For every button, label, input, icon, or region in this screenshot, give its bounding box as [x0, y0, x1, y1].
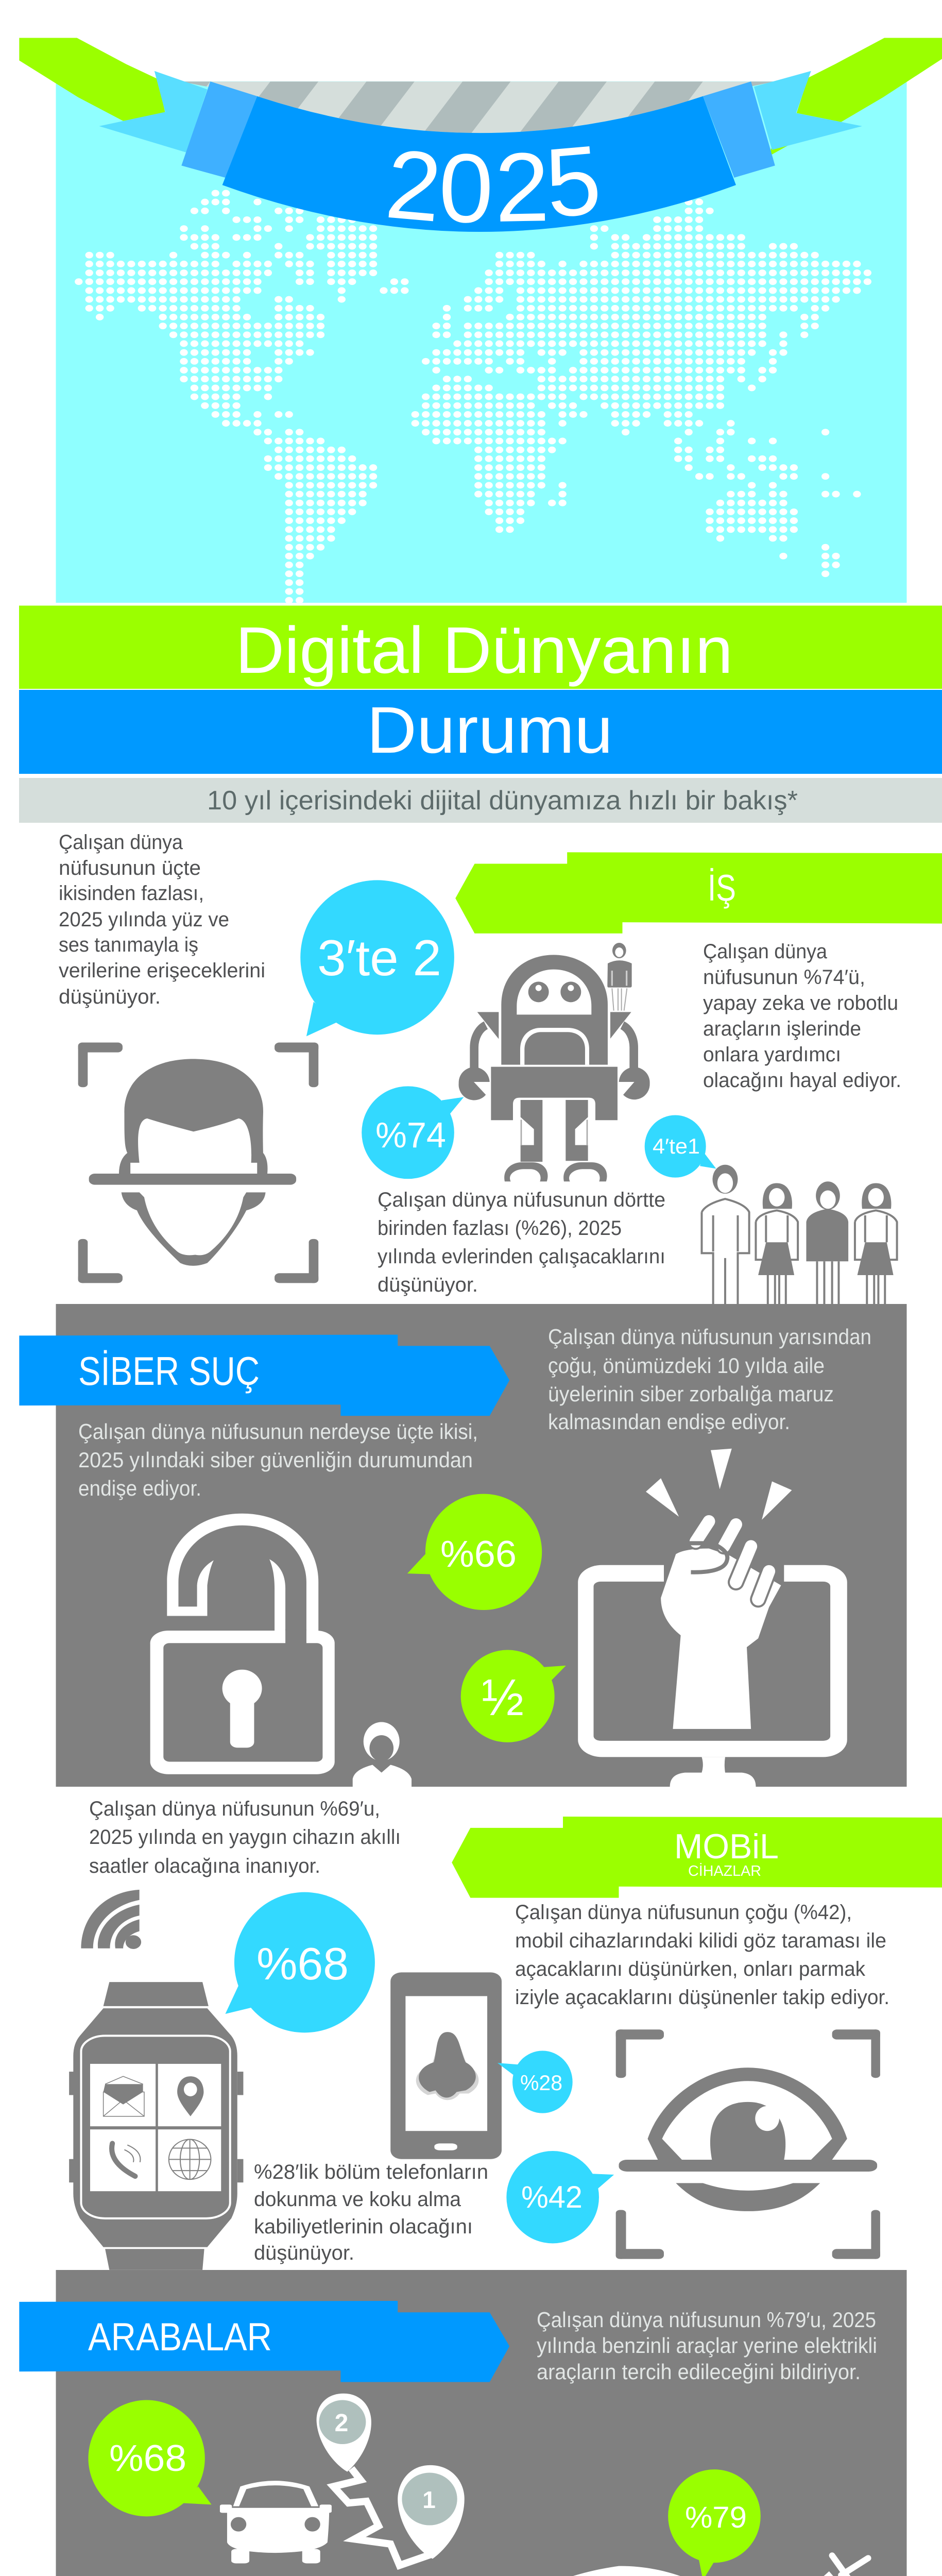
text: face recognition — [59, 831, 265, 1008]
text: electric cars — [537, 2308, 877, 2384]
bubble: 3'te 2 — [300, 880, 454, 1036]
text: cyber security concern: Çalışan dünya nüfusunun nerdeyse üçte ikisi, — [78, 1419, 478, 1444]
text: eye scan unlock — [515, 1901, 889, 2009]
bubble: 3'te 2: 3′te 2 — [317, 929, 441, 986]
banner: MOBİL CİHAZLAR: MOBiL — [674, 1827, 779, 1866]
bubble: 4'te 1: 4′te1 — [653, 1134, 700, 1158]
header: world map with 2025 ribbon — [19, 38, 942, 603]
section: İŞ — [59, 831, 942, 1304]
text: eye scan unlock: mobil cihazlarındaki kilidi göz taraması ile — [515, 1929, 886, 1952]
banner: ARABALAR: ARABALAR — [88, 2315, 272, 2359]
text: nose and touch: düşünüyor. — [254, 2242, 354, 2264]
panel backgrounds: grey sections — [56, 1304, 906, 2576]
bubble: %28: %28 — [520, 2071, 562, 2095]
text: nose and touch: %28′lik bölüm telefonların — [254, 2161, 488, 2183]
heading: Durumu: Durumu — [367, 693, 613, 767]
icon: fist breaking through monitor — [578, 1449, 847, 1787]
icon: self-driving car with route pins — [220, 2394, 465, 2565]
icon: self-driving car with route pins: 1 — [422, 2486, 436, 2513]
icon: self-driving car with route pins: 2 — [335, 2410, 348, 2437]
text: nose and touch: kabiliyetlerinin olacağını — [254, 2215, 473, 2238]
text: cyberbullying: üyelerinin siber zorbalığa maruz — [548, 1382, 834, 1406]
bubble: %68 — [88, 2400, 212, 2516]
bubble: %74 — [362, 1086, 464, 1179]
subtitle bar: 10 yıl içerisindeki dijital dünyamıza hızlı bir bakış* — [207, 786, 798, 816]
text: working from home: birinden fazlası (%26), 2025 — [378, 1217, 622, 1240]
text: robot assistants: araçların işlerinde — [703, 1018, 861, 1040]
text: working from home: Çalışan dünya nüfusunun dörtte — [378, 1189, 665, 1211]
bubble: %42 — [506, 2151, 614, 2243]
text: working from home: düşünüyor. — [378, 1274, 478, 1296]
text: face recognition: verilerine erişeceklerini — [59, 959, 265, 982]
text: cyberbullying: çoğu, önümüzdeki 10 yılda aile — [548, 1353, 825, 1378]
bubble: 1/2: ½ — [482, 1669, 524, 1726]
banner: SİBER SUÇ — [19, 1335, 509, 1416]
banner: SİBER SUÇ: SİBER SUÇ — [78, 1348, 260, 1394]
text: face recognition: nüfusunun üçte — [59, 857, 201, 879]
ribbon: blue banner — [99, 71, 862, 232]
text: face recognition: düşünüyor. — [59, 986, 161, 1008]
text: smart watches: Çalışan dünya nüfusunun %69′u, — [89, 1798, 380, 1820]
text: cyber security concern — [78, 1419, 478, 1500]
bubble: %68: %68 — [109, 2438, 186, 2479]
subtitle bar — [19, 778, 942, 823]
text: robot assistants: Çalışan dünya — [703, 940, 828, 963]
text: face recognition: ikisinden fazlası, — [59, 882, 204, 905]
text: working from home — [378, 1189, 665, 1296]
bubble: %42: %42 — [521, 2180, 583, 2214]
bubble: %68: %68 — [256, 1938, 349, 1989]
text: nose and touch: dokunma ve koku alma — [254, 2188, 461, 2211]
icon: electric car with plug — [404, 2555, 888, 2576]
bubble: %66: %66 — [440, 1534, 517, 1575]
text: cyberbullying: kalmasından endişe ediyor. — [548, 1410, 790, 1434]
heading: Digital Dünyanın: Digital Dünyanın — [235, 614, 733, 687]
bubble: %79: %79 — [685, 2501, 747, 2534]
ribbon: green tails — [19, 38, 942, 155]
text: working from home: yılında evlerinden çalışacaklarını — [378, 1245, 665, 1268]
text: robot assistants: yapay zeka ve robotlu — [703, 992, 898, 1014]
banner: İŞ: İŞ — [708, 868, 736, 909]
section: MOBİL CİHAZLAR — [69, 1798, 942, 2270]
text: robot assistants: onlara yardımcı — [703, 1043, 841, 1066]
icon: open padlock — [150, 1514, 335, 1774]
icon: face scan — [78, 1042, 318, 1283]
chart: dotted world map — [79, 193, 868, 600]
heading: Durumu — [19, 690, 942, 774]
text: robot assistants: nüfusunun %74′ü, — [703, 966, 865, 989]
icon: robot with small person — [459, 943, 650, 1181]
text: face recognition: Çalışan dünya — [59, 831, 183, 854]
text: smart watches: 2025 yılında en yaygın cihazın akıllı — [89, 1826, 401, 1849]
bubble: %79 — [668, 2469, 761, 2576]
text: electric cars: Çalışan dünya nüfusunun %79′u, 2025 — [537, 2308, 876, 2332]
text: face recognition: 2025 yılında yüz ve — [59, 908, 229, 931]
text: cyber security concern: 2025 yılındaki siber güvenliğin durumundan — [78, 1448, 473, 1472]
heading: Digital Dünyanın — [19, 606, 942, 689]
text: eye scan unlock: iziyle açacaklarını düşünenler takip ediyor. — [515, 1986, 889, 2009]
text: cyber security concern: endişe ediyor. — [78, 1476, 201, 1500]
icon: phone with nose — [390, 1972, 502, 2159]
text: smart watches — [89, 1798, 401, 1877]
bubble: %74: %74 — [375, 1115, 446, 1155]
bubble: 4'te 1 — [645, 1115, 716, 1178]
banner: MOBİL CİHAZLAR: CİHAZLAR — [688, 1862, 761, 1879]
text: robot assistants — [703, 940, 901, 1092]
bubble: %28 — [498, 2050, 573, 2113]
bubble: %68 — [225, 1892, 375, 2032]
text: smart watches: saatler olacağına inanıyor. — [89, 1855, 320, 1877]
icon: wifi signal — [81, 1890, 141, 1949]
ribbon: striped arc — [184, 81, 773, 133]
bubble: %66 — [407, 1494, 542, 1610]
section: ARABALAR — [19, 2301, 888, 2576]
text: cyberbullying — [548, 1325, 871, 1434]
text: robot assistants: olacağını hayal ediyor. — [703, 1069, 901, 1092]
section: SİBER SUÇ — [19, 1325, 871, 1787]
icon: eye scan — [616, 2029, 880, 2259]
text: cyberbullying: Çalışan dünya nüfusunun yarısından — [548, 1325, 871, 1349]
banner: ARABALAR — [19, 2301, 509, 2382]
panel: map background — [56, 81, 906, 603]
title: 2025: 2025 — [382, 125, 605, 244]
text: face recognition: ses tanımayla iş — [59, 934, 198, 956]
text: eye scan unlock: açacaklarını düşünürken, onları parmak — [515, 1958, 866, 1980]
text: electric cars: araçların tercih edileceğini bildiriyor. — [537, 2360, 861, 2384]
icon: four workers — [701, 1165, 897, 1304]
banner: MOBİL CİHAZLAR — [452, 1817, 942, 1898]
icon: small person — [353, 1722, 412, 1787]
bubble: 1/2 — [461, 1650, 566, 1742]
text: nose and touch — [254, 2161, 488, 2264]
text: eye scan unlock: Çalışan dünya nüfusunun çoğu (%42), — [515, 1901, 852, 1924]
text: electric cars: yılında benzinli araçlar yerine elektrikli — [537, 2333, 877, 2358]
icon: smart watch — [69, 1982, 243, 2270]
banner: İŞ — [455, 852, 942, 934]
